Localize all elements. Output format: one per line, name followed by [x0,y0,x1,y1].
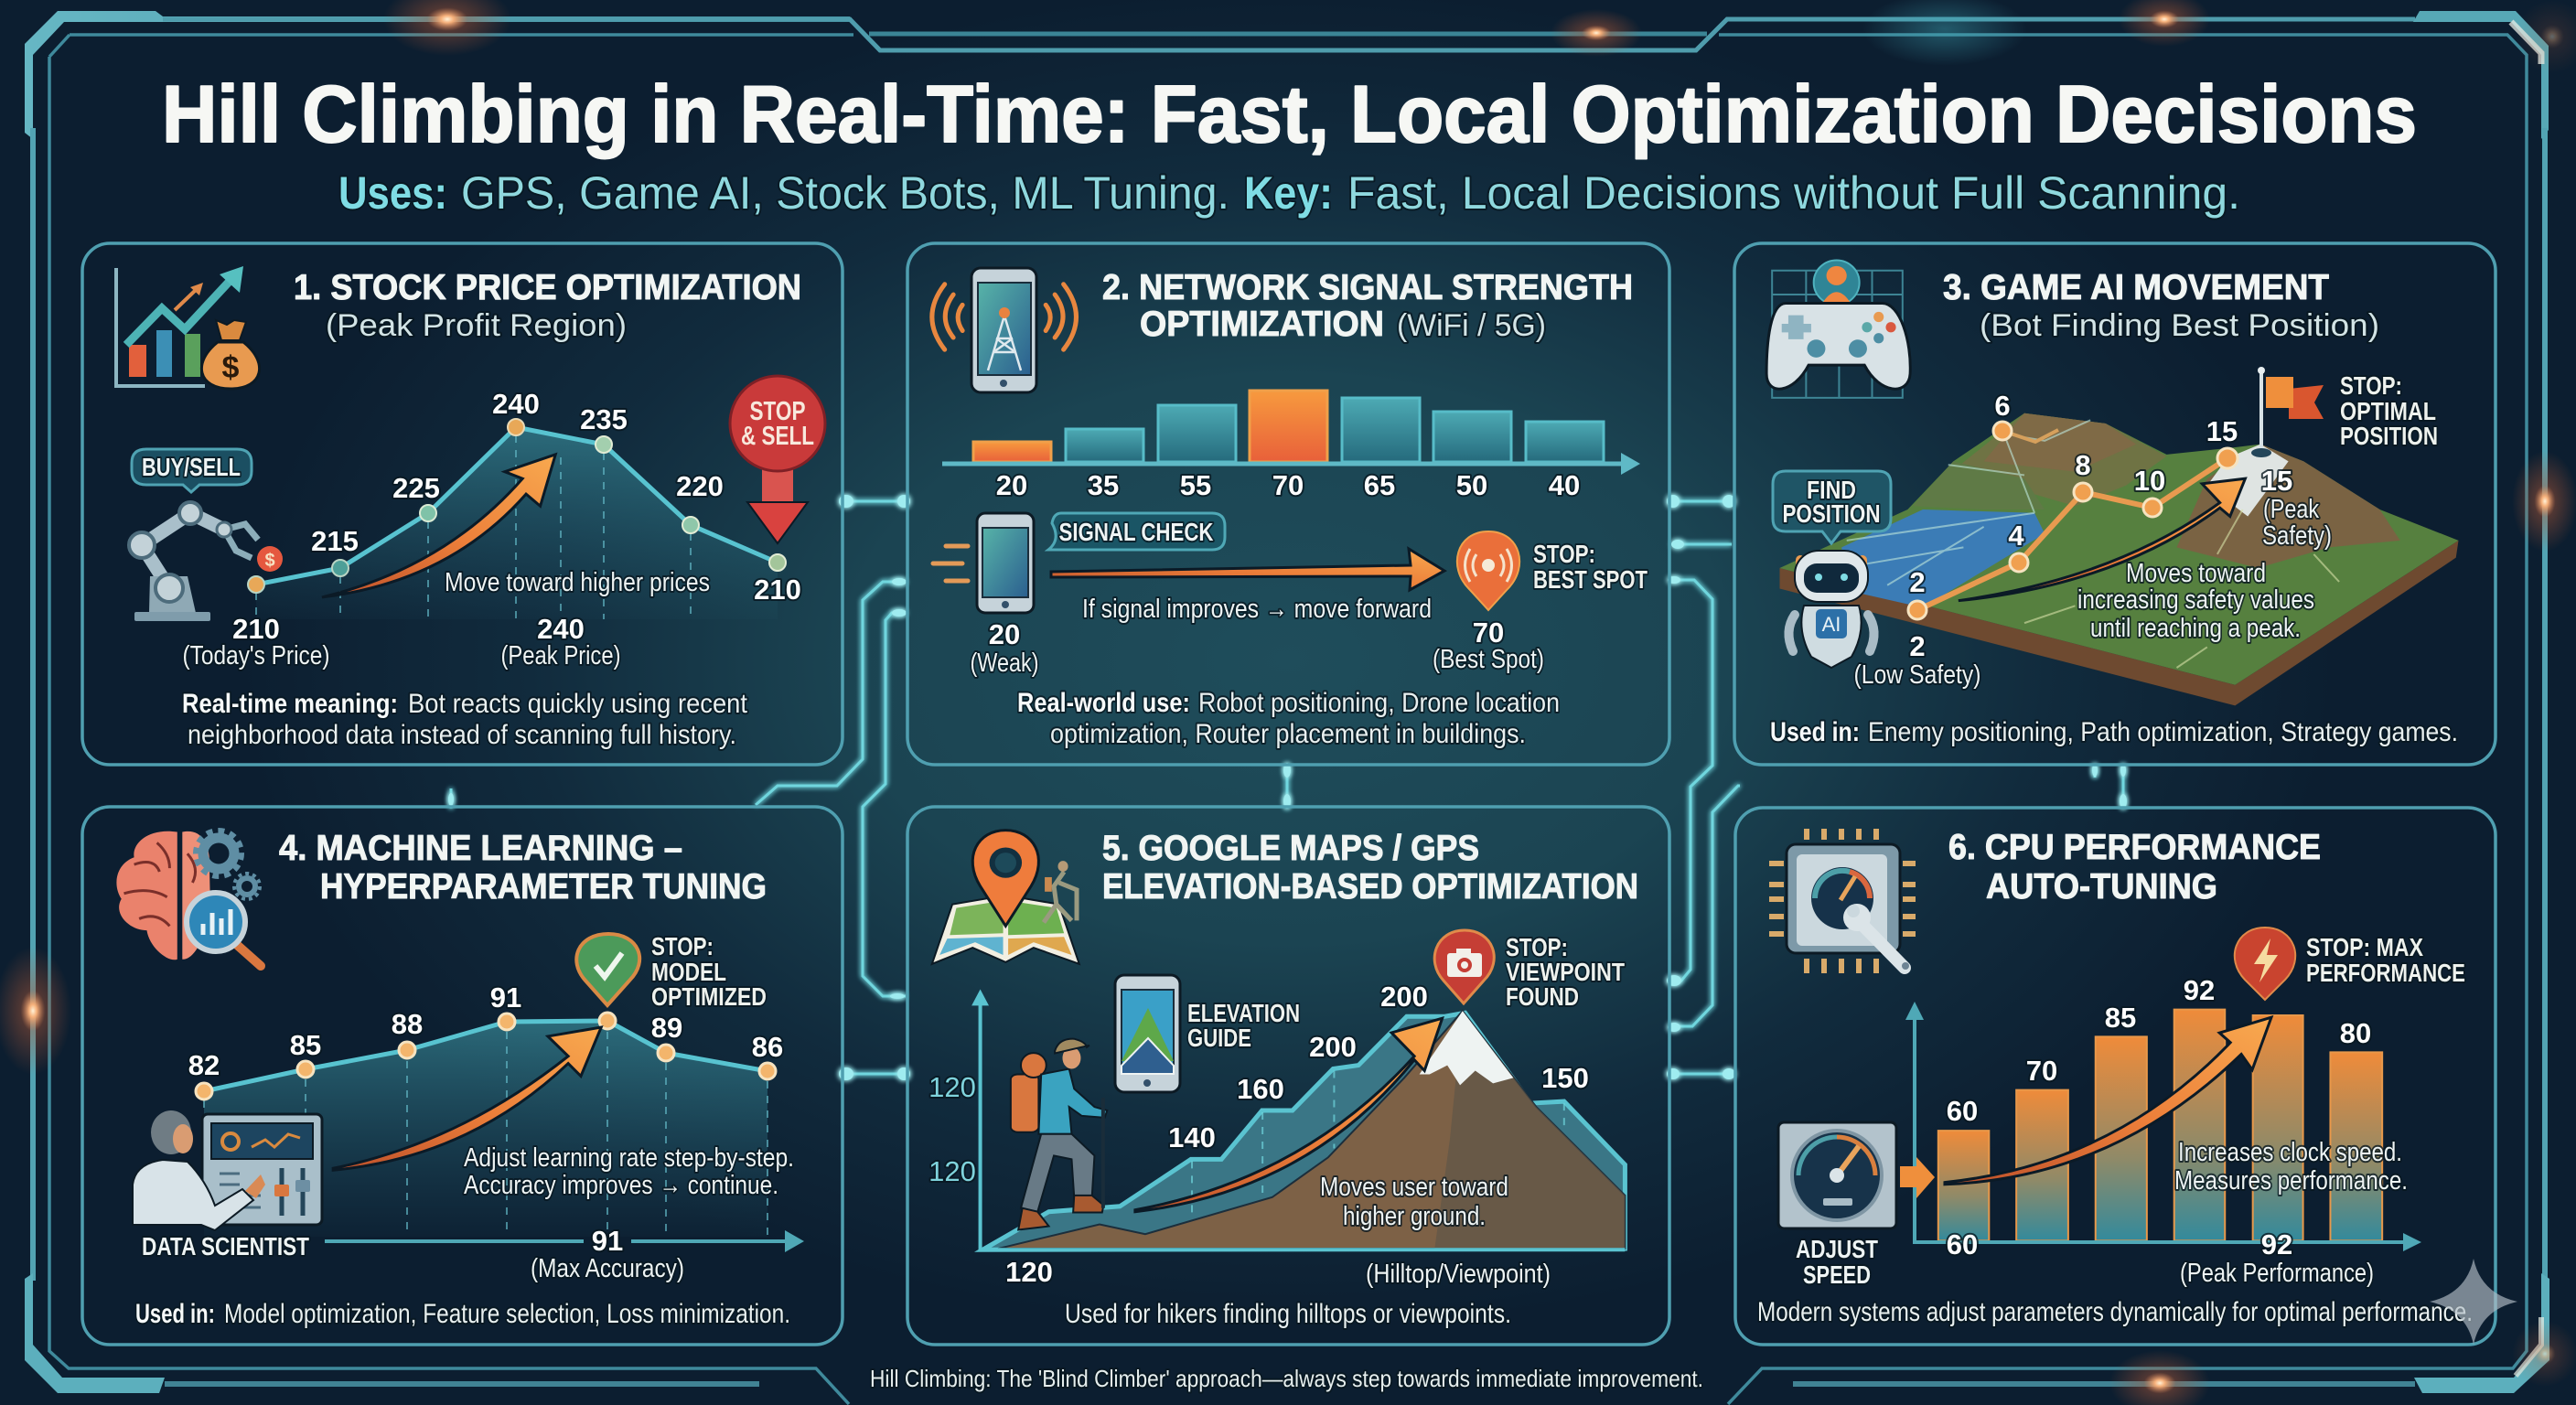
stop pin: best spot: STOP: [1533,540,1595,568]
stop pin: viewpoint found: VIEWPOINT [1506,958,1625,986]
bar chart: performance [1905,974,2421,1288]
icon: chart with money bag [116,266,260,389]
heading: panel 6 [1948,828,2351,914]
terrain with path: (Peak [2263,495,2319,524]
footer: used for hikers: Used for hikers finding hilltops or viewpoints. [1065,1299,1511,1329]
terrain with path: 10 [2134,465,2165,497]
bar chart: signal: 50 [1456,469,1487,501]
icon: cpu with gauge and wrench [1769,829,1916,973]
mountain elevation chart [928,981,1625,1249]
stop flag: optimal position: POSITION [2340,422,2438,450]
panel 6: cpu performance [1735,808,2496,1345]
axis: max accuracy: (Max Accuracy) [531,1254,684,1283]
annotation: adjust learning rate: Accuracy improves → continue. [464,1171,778,1200]
heading: panel 2: OPTIMIZATION [1140,305,1384,344]
value label: low safety: 2 [1909,630,1926,662]
mountain elevation chart: 200 [1380,981,1428,1013]
stop pin: max performance [2235,928,2465,1000]
line chart: price: 220 [676,470,724,502]
terrain with path: 2 [1909,566,1926,598]
line chart: price: 240 [492,388,540,420]
heading: panel 6: 6. CPU PERFORMANCE [1948,828,2321,867]
heading: panel 6: AUTO-TUNING [1986,867,2217,906]
heading: panel 2 [1102,268,1633,354]
icon: phone weak signal [933,513,1034,613]
stop pin: viewpoint found [1434,930,1625,1011]
mountain elevation chart: 140 [1168,1121,1216,1153]
stop pin: viewpoint found: FOUND [1506,982,1579,1011]
value labels: (Weak) [970,649,1039,678]
annotation: moves toward safety [2077,559,2314,643]
icon: phone with tower [932,268,1076,392]
callout: signal check [1048,513,1225,550]
footer: used in: Enemy positioning, Path optimization, Strategy games. [1868,717,2458,747]
icon: adjust speed gauge [1778,1122,1935,1289]
subtitle: Fast, Local Decisions without Full Scanning. [1347,167,2240,219]
icon: adjust speed gauge: SPEED [1803,1260,1871,1289]
footer: real-world use: Robot positioning, Drone location [1198,688,1560,718]
arrow: accuracy climb [333,1027,601,1170]
annotation: increases clock speed: Measures performance. [2174,1166,2408,1196]
line chart: price: 235 [580,403,628,435]
stop pin: viewpoint found: STOP: [1506,933,1568,961]
heading: panel 3: 3. GAME AI MOVEMENT [1943,268,2329,307]
footer: real-world use [1017,688,1560,749]
icon: AI robot [1788,551,1874,668]
icon: chart with money bag: $ [222,350,240,385]
stop pin: model optimized [576,932,767,1011]
heading: panel 3 [1943,268,2382,354]
axis: max accuracy [325,1225,804,1283]
arrow: signal improves [1051,549,1444,590]
stop pin: model optimized: OPTIMIZED [651,982,767,1011]
icon: elevation guide phone [1115,975,1300,1092]
terrain with path: Safety) [2262,521,2332,551]
terrain with path: 15 [2206,415,2238,447]
bar chart: performance: 92 [2261,1228,2292,1260]
icon: robot arm [129,502,283,621]
bar chart: signal: 40 [1549,469,1580,501]
annotation: adjust learning rate [464,1143,794,1200]
stop pin: max performance: PERFORMANCE [2306,959,2465,987]
annotation: moves toward safety: Moves toward [2126,559,2266,588]
annotation: adjust learning rate: Adjust learning rate step-by-step. [464,1143,794,1173]
annotation: move toward higher prices: Move toward higher prices [445,568,710,597]
icon: elevation guide phone: ELEVATION [1187,999,1300,1027]
stop flag: optimal position [2251,367,2438,457]
heading: panel 4 [279,829,767,913]
mountain elevation chart: 150 [1541,1062,1589,1094]
callout: find position [1773,471,1891,543]
arrow: performance climb [1945,1017,2271,1185]
heading: panel 5 [1102,829,1638,913]
line chart: accuracy: 85 [290,1029,321,1061]
subtitle [338,167,2240,219]
bar chart: signal: 70 [1272,469,1304,501]
annotation: signal rule: If signal improves → move forward [1082,595,1432,624]
heading: panel 2: (WiFi / 5G) [1397,308,1546,343]
icon: map pin and hiker [932,831,1079,964]
line chart: price: 210 [754,574,801,606]
value label: low safety: (Low Safety) [1853,660,1981,690]
mountain elevation chart: 120 [928,1071,976,1103]
panel 5: google maps gps elevation [907,807,1669,1345]
axis labels: (Hilltop/Viewpoint) [1366,1260,1551,1289]
terrain with path: 8 [2075,449,2091,481]
mountain elevation chart: 200 [1309,1031,1357,1063]
footer: real-time meaning: neighborhood data instead of scanning full history. [188,720,736,750]
mountain elevation chart: 120 [928,1155,976,1187]
callout: buy/sell: BUY/SELL [142,453,241,481]
line chart: price [248,388,801,619]
stop flag: optimal position: OPTIMAL [2340,397,2436,425]
icon: adjust speed gauge: ADJUST [1796,1235,1878,1263]
bar chart: performance: 85 [2105,1002,2136,1034]
annotation: moves user toward [1320,1173,1508,1231]
terrain with path: 15 [2261,465,2292,497]
axis labels [1005,1256,1551,1289]
line chart: accuracy: 82 [188,1049,220,1081]
stop flag: optimal position: STOP: [2340,371,2402,400]
annotation: moves user toward: higher ground. [1343,1202,1486,1231]
icon: game controller [1766,260,1910,398]
heading: panel 2: 2. NETWORK SIGNAL STRENGTH [1102,268,1633,307]
icon: AI robot: AI [1822,613,1841,636]
heading: panel 4: 4. MACHINE LEARNING – [279,829,682,868]
terrain with path [1779,390,2459,705]
footer: real-time meaning: Real-time meaning: [182,689,398,719]
axis labels: 210 [232,613,280,645]
annotation: moves user toward: Moves user toward [1320,1173,1508,1202]
callout: signal check: SIGNAL CHECK [1059,518,1213,546]
bar chart: performance: 70 [2026,1055,2057,1087]
stop pin: max performance: STOP: MAX [2306,933,2423,961]
bar chart: performance: 92 [2184,974,2215,1006]
value labels: (Best Spot) [1433,645,1544,674]
mountain elevation chart: 160 [1237,1073,1284,1105]
line chart: accuracy [188,981,783,1237]
line chart: accuracy: 91 [490,981,521,1014]
arrow: climb [322,455,555,597]
bar chart: performance: 80 [2340,1017,2371,1049]
footer: real-world use: optimization, Router placement in buildings. [1050,719,1526,749]
bar chart: signal: 65 [1364,469,1395,501]
footer: real-time meaning [182,689,748,750]
subtitle: Uses: [338,167,447,219]
panel 1: stock price optimization [82,243,843,765]
axis: max accuracy: 91 [592,1225,623,1257]
footer: used in: Used in: [135,1299,215,1329]
terrain with path: 6 [1994,390,2011,422]
value labels [970,617,1544,678]
heading: panel 1: 1. STOCK PRICE OPTIMIZATION [294,268,801,307]
stop and sell sign: STOP [750,397,805,426]
heading: panel 1: (Peak Profit Region) [326,308,627,343]
icon: robot arm: $ [264,551,275,571]
value labels: 70 [1473,617,1504,649]
annotation: moves toward safety: increasing safety values [2077,585,2314,615]
heading: panel 4: HYPERPARAMETER TUNING [320,867,767,906]
terrain with path: 4 [2008,520,2024,552]
panel 3: game ai movement [1734,243,2496,765]
value labels: 20 [989,618,1020,650]
subtitle: Key: [1244,167,1333,219]
icon: brain gears magnifier [116,831,261,966]
bar chart: performance: 60 [1947,1095,1978,1127]
footer: real-time meaning: Bot reacts quickly using recent [408,689,748,719]
line chart: price: 215 [311,525,359,557]
axis labels: (Peak Price) [501,641,620,670]
stop and sell sign [730,376,825,543]
line chart: accuracy: 88 [392,1008,423,1040]
footer: used in: Used in: [1770,717,1860,747]
bar chart: signal [942,391,1640,501]
heading: panel 1 [294,268,801,354]
icon: sparkle watermark [2430,1259,2517,1345]
footer: real-world use: Real-world use: [1017,688,1190,718]
icon: data scientist at console [133,1110,322,1230]
footer: used in: Model optimization, Feature selection, Loss minimization. [224,1299,790,1329]
subtitle: GPS, Game AI, Stock Bots, ML Tuning. [461,167,1229,219]
axis labels: 120 [1005,1256,1053,1288]
panel 4: machine learning tuning [82,807,843,1345]
stop pin: model optimized: MODEL [651,958,726,986]
label: data scientist: DATA SCIENTIST [142,1232,309,1260]
stop and sell sign: & SELL [741,422,814,451]
stop pin: best spot: BEST SPOT [1533,565,1648,594]
icon: elevation guide phone: GUIDE [1187,1024,1251,1052]
bar chart: performance: 60 [1947,1228,1978,1260]
axis labels: (Today's Price) [183,641,329,670]
caption: Hill Climbing: The 'Blind Climber' approach—always step towards immediate improvement. [870,1365,1703,1392]
bar chart: signal: 55 [1180,469,1211,501]
heading: panel 5: ELEVATION-BASED OPTIMIZATION [1102,867,1638,906]
bar chart: performance: (Peak Performance) [2180,1259,2374,1288]
callout: buy/sell [132,449,252,492]
line chart: price: 225 [392,472,440,504]
circuit connectors between panels [448,495,2127,1080]
axis labels: 240 [537,613,585,645]
title: Hill Climbing in Real-Time: Fast, Local Optimization Decisions [162,69,2417,159]
line chart: accuracy: 89 [651,1012,682,1044]
heading: panel 3: (Bot Finding Best Position) [1980,308,2379,343]
bar chart: signal: 35 [1088,469,1119,501]
bar chart: signal: 20 [996,469,1027,501]
panel 2: network signal strength [907,243,1669,765]
axis labels [183,613,620,670]
stop pin: best spot [1457,531,1648,610]
stop pin: model optimized: STOP: [651,932,714,960]
annotation: moves toward safety: until reaching a peak. [2090,614,2301,643]
annotation: increases clock speed [2174,1138,2408,1196]
callout: find position: FIND [1807,476,1856,504]
line chart: accuracy: 86 [752,1031,783,1063]
annotation: increases clock speed: Increases clock speed. [2178,1138,2402,1167]
heading: panel 5: 5. GOOGLE MAPS / GPS [1102,829,1479,868]
callout: find position: POSITION [1782,499,1881,528]
icon: hiker [1011,1039,1107,1229]
value label: low safety [1853,630,1981,690]
